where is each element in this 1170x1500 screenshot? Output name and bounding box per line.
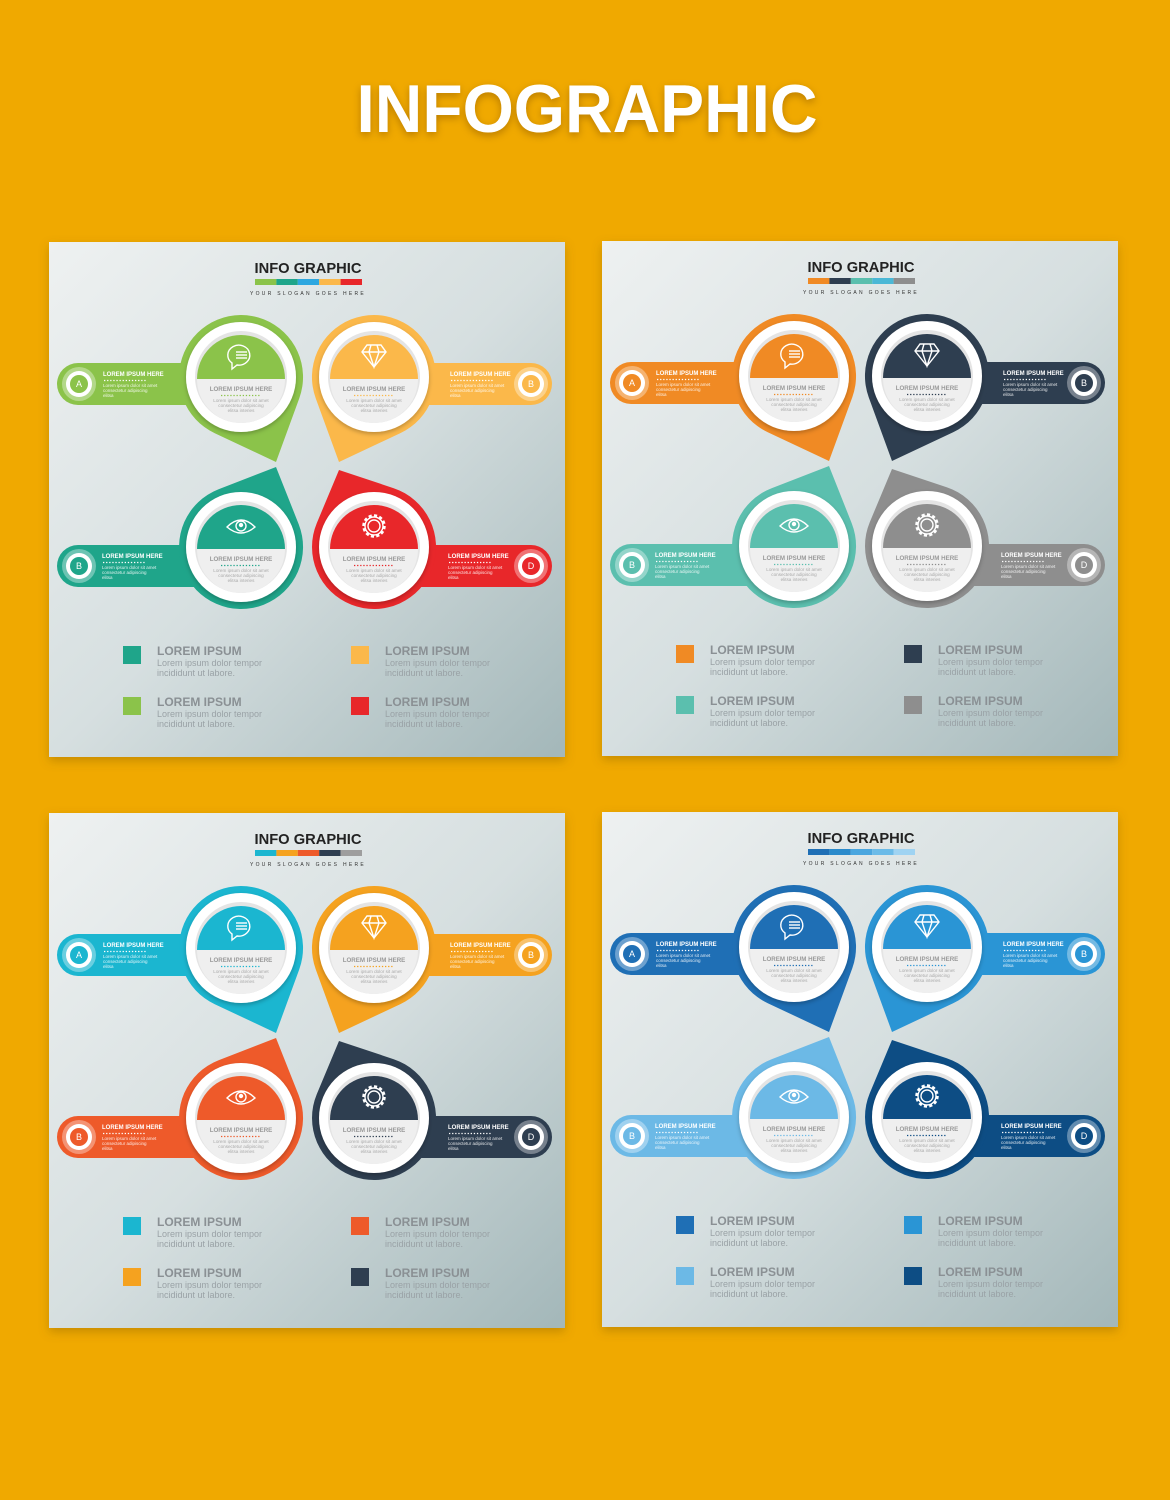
circle: eye: LOREM IPSUM HERE [210, 1127, 272, 1134]
circle: diamond: elitsa interies [914, 407, 941, 412]
legend: Lorem ipsum dolor tempor [157, 658, 262, 668]
panel: orange/dark/teal/gray [602, 241, 1118, 756]
tab D: Lorem ipsum dolor sit amet [1001, 1135, 1056, 1140]
circle: chat: consectetur adipiscing [771, 973, 817, 978]
legend: LOREM IPSUM [938, 1265, 1023, 1279]
circle: diamond: LOREM IPSUM HERE [343, 386, 405, 393]
legend: LOREM IPSUM [385, 1266, 470, 1280]
tab A [57, 363, 241, 405]
tab B: consectetur adipiscing [1003, 958, 1048, 963]
icon: chat bubble [781, 915, 803, 939]
legend: LOREM IPSUM [710, 1214, 795, 1228]
circle: eye: elitsa interies [228, 578, 255, 583]
tab D: Lorem ipsum dolor sit amet [448, 565, 503, 570]
tab C: elitsa [655, 1145, 666, 1150]
tab D: D [528, 561, 535, 571]
legend: incididunt ut labore. [157, 719, 235, 729]
circle: eye: consectetur adipiscing [218, 1144, 264, 1149]
circle: chat: elitsa interies [781, 407, 808, 412]
circle: chat: LOREM IPSUM HERE [210, 957, 272, 964]
legend: Lorem ipsum dolor tempor [710, 708, 815, 718]
circle: eye [732, 1037, 856, 1179]
circle: diamond: consectetur adipiscing [351, 974, 397, 979]
circle: gear: LOREM IPSUM HERE [343, 556, 405, 563]
legend [123, 644, 490, 729]
legend: Lorem ipsum dolor tempor [385, 709, 490, 719]
circle: diamond [865, 314, 989, 461]
circle: eye: consectetur adipiscing [771, 1143, 817, 1148]
panel title: INFO GRAPHIC [254, 831, 362, 848]
circle: chat: Lorem ipsum dolor sit amet [766, 397, 822, 402]
tab A: elitsa [656, 963, 667, 968]
circle: eye: LOREM IPSUM HERE [763, 555, 825, 562]
legend: LOREM IPSUM [157, 644, 242, 658]
legend: Lorem ipsum dolor tempor [710, 1279, 815, 1289]
circle: gear: elitsa interies [361, 1149, 388, 1154]
tab A: Lorem ipsum dolor sit amet [656, 953, 711, 958]
tab C: Lorem ipsum dolor sit amet [102, 1136, 157, 1141]
tab C: elitsa [102, 1146, 113, 1151]
panel title [250, 831, 366, 868]
panel: green/yellow/teal/red [49, 242, 565, 757]
tab A: Lorem ipsum dolor sit amet [103, 954, 158, 959]
tab C: elitsa [655, 574, 666, 579]
legend: incididunt ut labore. [710, 718, 788, 728]
tab B: B [528, 950, 534, 960]
tab D: consectetur adipiscing [1001, 1140, 1046, 1145]
legend: LOREM IPSUM [157, 695, 242, 709]
legend: Lorem ipsum dolor tempor [938, 1279, 1043, 1289]
circle: diamond: LOREM IPSUM HERE [343, 957, 405, 964]
icon: eye [780, 1090, 808, 1103]
circle: gear: elitsa interies [914, 577, 941, 582]
tab A: LOREM IPSUM HERE [103, 943, 164, 949]
tab A: elitsa [103, 393, 114, 398]
circle: diamond: consectetur adipiscing [351, 403, 397, 408]
icon: gear [917, 515, 937, 535]
circle: diamond: elitsa interies [361, 408, 388, 413]
circle: gear [312, 470, 436, 609]
tab C: consectetur adipiscing [655, 1140, 700, 1145]
tab A: LOREM IPSUM HERE [103, 372, 164, 378]
legend: incididunt ut labore. [385, 1290, 463, 1300]
tab B: elitsa [450, 393, 461, 398]
circle: diamond: consectetur adipiscing [904, 973, 950, 978]
tab D [927, 544, 1105, 586]
circle: chat: LOREM IPSUM HERE [210, 386, 272, 393]
tab D: LOREM IPSUM HERE [448, 1125, 509, 1131]
tab A: A [76, 950, 82, 960]
circle: chat [732, 885, 856, 1032]
circle: gear: Lorem ipsum dolor sit amet [899, 567, 955, 572]
legend: LOREM IPSUM [710, 1265, 795, 1279]
tab B: LOREM IPSUM HERE [450, 943, 511, 949]
legend: Lorem ipsum dolor tempor [157, 709, 262, 719]
icon: eye [227, 520, 255, 533]
circle: diamond: LOREM IPSUM HERE [896, 385, 958, 392]
legend: incididunt ut labore. [385, 668, 463, 678]
circle: diamond: elitsa interies [914, 978, 941, 983]
circle: diamond [312, 315, 436, 462]
circle: eye: consectetur adipiscing [771, 572, 817, 577]
panel: cyan/orange/red-orange/dark [49, 813, 565, 1328]
circle: eye [179, 467, 303, 609]
circle: diamond: Lorem ipsum dolor sit amet [899, 397, 955, 402]
tab C: Lorem ipsum dolor sit amet [102, 565, 157, 570]
legend: Lorem ipsum dolor tempor [938, 657, 1043, 667]
circle: gear: Lorem ipsum dolor sit amet [346, 568, 402, 573]
tab D: Lorem ipsum dolor sit amet [1001, 564, 1056, 569]
legend: Lorem ipsum dolor tempor [938, 1228, 1043, 1238]
circle: chat: consectetur adipiscing [771, 402, 817, 407]
circle: chat: Lorem ipsum dolor sit amet [213, 398, 269, 403]
circle: chat [179, 886, 303, 1033]
tab A: consectetur adipiscing [656, 958, 701, 963]
tab B: elitsa [1003, 963, 1014, 968]
legend: LOREM IPSUM [938, 694, 1023, 708]
circle: gear: elitsa interies [914, 1148, 941, 1153]
circle: diamond [312, 886, 436, 1033]
tab B: LOREM IPSUM HERE [1003, 371, 1064, 377]
tab C [610, 1115, 794, 1157]
circle: gear: consectetur adipiscing [351, 1144, 397, 1149]
tab B: Lorem ipsum dolor sit amet [1003, 953, 1058, 958]
tab A: A [76, 379, 82, 389]
circle: diamond: consectetur adipiscing [904, 402, 950, 407]
legend: incididunt ut labore. [157, 668, 235, 678]
circle: eye [179, 1038, 303, 1180]
circle: gear: consectetur adipiscing [904, 1143, 950, 1148]
circle: chat: Lorem ipsum dolor sit amet [213, 969, 269, 974]
circle: gear: LOREM IPSUM HERE [343, 1127, 405, 1134]
tab C: consectetur adipiscing [655, 569, 700, 574]
tab A: consectetur adipiscing [103, 959, 148, 964]
tab D: LOREM IPSUM HERE [1001, 553, 1062, 559]
tab A: elitsa [103, 964, 114, 969]
circle: diamond: Lorem ipsum dolor sit amet [899, 968, 955, 973]
legend: LOREM IPSUM [710, 643, 795, 657]
circle: chat [179, 315, 303, 462]
circle: eye [732, 466, 856, 608]
legend: LOREM IPSUM [157, 1215, 242, 1229]
tab B: consectetur adipiscing [1003, 387, 1048, 392]
tab B: consectetur adipiscing [450, 388, 495, 393]
legend: LOREM IPSUM [385, 695, 470, 709]
tab D: LOREM IPSUM HERE [1001, 1124, 1062, 1130]
tab A: LOREM IPSUM HERE [656, 942, 717, 948]
tab B: consectetur adipiscing [450, 959, 495, 964]
tab C: LOREM IPSUM HERE [102, 554, 163, 560]
circle: chat: consectetur adipiscing [218, 403, 264, 408]
tab A: LOREM IPSUM HERE [656, 371, 717, 377]
circle: chat: Lorem ipsum dolor sit amet [766, 968, 822, 973]
tab B [927, 933, 1105, 975]
tab C [57, 1116, 241, 1158]
circle: diamond: Lorem ipsum dolor sit amet [346, 398, 402, 403]
main title: INFOGRAPHIC [356, 71, 818, 147]
tab C: B [629, 1131, 635, 1141]
circle: gear: consectetur adipiscing [351, 573, 397, 578]
tab D: elitsa [1001, 1145, 1012, 1150]
tab B [374, 934, 552, 976]
circle: gear: LOREM IPSUM HERE [896, 555, 958, 562]
tab A: Lorem ipsum dolor sit amet [103, 383, 158, 388]
tab D: consectetur adipiscing [448, 1141, 493, 1146]
legend: Lorem ipsum dolor tempor [385, 1229, 490, 1239]
tab B: Lorem ipsum dolor sit amet [1003, 382, 1058, 387]
icon: gear [917, 1086, 937, 1106]
tab C: B [76, 561, 82, 571]
circle: eye: Lorem ipsum dolor sit amet [766, 567, 822, 572]
tab C: elitsa [102, 575, 113, 580]
legend: incididunt ut labore. [157, 1239, 235, 1249]
legend: Lorem ipsum dolor tempor [385, 1280, 490, 1290]
tab C: Lorem ipsum dolor sit amet [655, 564, 710, 569]
legend: Lorem ipsum dolor tempor [157, 1229, 262, 1239]
circle: gear [865, 469, 989, 608]
circle: gear [865, 1040, 989, 1179]
tab C: LOREM IPSUM HERE [655, 553, 716, 559]
tab A [610, 362, 794, 404]
tab D: consectetur adipiscing [448, 570, 493, 575]
tab B: elitsa [450, 964, 461, 969]
tab A: consectetur adipiscing [656, 387, 701, 392]
circle: chat: LOREM IPSUM HERE [763, 956, 825, 963]
tab D: D [528, 1132, 535, 1142]
circle: gear: Lorem ipsum dolor sit amet [346, 1139, 402, 1144]
tab C [610, 544, 794, 586]
circle: eye: Lorem ipsum dolor sit amet [213, 1139, 269, 1144]
legend: incididunt ut labore. [938, 1238, 1016, 1248]
tab A: A [629, 378, 635, 388]
icon: eye [780, 519, 808, 532]
circle: gear: elitsa interies [361, 578, 388, 583]
tab B [927, 362, 1105, 404]
legend: incididunt ut labore. [938, 667, 1016, 677]
legend: LOREM IPSUM [385, 644, 470, 658]
icon: diamond [915, 344, 939, 366]
legend: incididunt ut labore. [710, 1238, 788, 1248]
legend: incididunt ut labore. [710, 667, 788, 677]
tab B: LOREM IPSUM HERE [450, 372, 511, 378]
tab B: B [528, 379, 534, 389]
tab C: consectetur adipiscing [102, 1141, 147, 1146]
legend: LOREM IPSUM [157, 1266, 242, 1280]
panel title [803, 830, 919, 867]
tab D: Lorem ipsum dolor sit amet [448, 1136, 503, 1141]
icon: diamond [362, 345, 386, 367]
tab B: B [1081, 949, 1087, 959]
legend: Lorem ipsum dolor tempor [385, 658, 490, 668]
panel title: YOUR SLOGAN GOES HERE [250, 291, 366, 297]
legend: Lorem ipsum dolor tempor [938, 708, 1043, 718]
tab B: B [1081, 378, 1087, 388]
legend: Lorem ipsum dolor tempor [710, 657, 815, 667]
tab C: B [76, 1132, 82, 1142]
circle: diamond [865, 885, 989, 1032]
tab C: B [629, 560, 635, 570]
legend: incididunt ut labore. [385, 719, 463, 729]
circle: gear: Lorem ipsum dolor sit amet [899, 1138, 955, 1143]
icon: chat bubble [781, 344, 803, 368]
tab D: consectetur adipiscing [1001, 569, 1046, 574]
tab D: elitsa [448, 1146, 459, 1151]
tab A [57, 934, 241, 976]
circle: eye: Lorem ipsum dolor sit amet [213, 568, 269, 573]
panel title: YOUR SLOGAN GOES HERE [803, 290, 919, 296]
circle: eye: elitsa interies [781, 577, 808, 582]
icon: diamond [915, 915, 939, 937]
legend: Lorem ipsum dolor tempor [710, 1228, 815, 1238]
circle: eye: consectetur adipiscing [218, 573, 264, 578]
tab D: elitsa [448, 575, 459, 580]
tab D [374, 1116, 552, 1158]
tab A: elitsa [656, 392, 667, 397]
circle: chat: consectetur adipiscing [218, 974, 264, 979]
circle: chat: LOREM IPSUM HERE [763, 385, 825, 392]
panel title: INFO GRAPHIC [254, 260, 362, 277]
legend: LOREM IPSUM [938, 643, 1023, 657]
circle: eye: Lorem ipsum dolor sit amet [766, 1138, 822, 1143]
tab D: D [1081, 1131, 1088, 1141]
legend: incididunt ut labore. [938, 1289, 1016, 1299]
circle: chat: elitsa interies [228, 979, 255, 984]
circle: diamond: Lorem ipsum dolor sit amet [346, 969, 402, 974]
panel title: YOUR SLOGAN GOES HERE [803, 861, 919, 867]
circle: diamond: elitsa interies [361, 979, 388, 984]
circle: eye: elitsa interies [781, 1148, 808, 1153]
circle: eye: elitsa interies [228, 1149, 255, 1154]
tab D: D [1081, 560, 1088, 570]
tab B: elitsa [1003, 392, 1014, 397]
icon: chat bubble [228, 345, 250, 369]
legend: incididunt ut labore. [710, 1289, 788, 1299]
panel: blues [602, 812, 1118, 1327]
legend: incididunt ut labore. [938, 718, 1016, 728]
legend: LOREM IPSUM [938, 1214, 1023, 1228]
circle: eye: LOREM IPSUM HERE [210, 556, 272, 563]
tab B [374, 363, 552, 405]
circle: diamond: LOREM IPSUM HERE [896, 956, 958, 963]
circle: gear: LOREM IPSUM HERE [896, 1126, 958, 1133]
legend: incididunt ut labore. [385, 1239, 463, 1249]
legend: LOREM IPSUM [385, 1215, 470, 1229]
circle: chat: elitsa interies [228, 408, 255, 413]
legend: incididunt ut labore. [157, 1290, 235, 1300]
tab A: Lorem ipsum dolor sit amet [656, 382, 711, 387]
panel title [250, 260, 366, 297]
tab B: Lorem ipsum dolor sit amet [450, 954, 505, 959]
panel title: INFO GRAPHIC [808, 259, 915, 276]
circle: chat [732, 314, 856, 461]
panel title [803, 259, 919, 296]
legend [676, 643, 1043, 728]
tab C: Lorem ipsum dolor sit amet [655, 1135, 710, 1140]
tab C: LOREM IPSUM HERE [102, 1125, 163, 1131]
tab A: consectetur adipiscing [103, 388, 148, 393]
tab A [610, 933, 794, 975]
icon: gear [364, 1087, 384, 1107]
panel title: YOUR SLOGAN GOES HERE [250, 862, 366, 868]
tab D: elitsa [1001, 574, 1012, 579]
icon: gear [364, 516, 384, 536]
circle: gear [312, 1041, 436, 1180]
tab B: LOREM IPSUM HERE [1003, 942, 1064, 948]
legend [676, 1214, 1043, 1299]
tab D: LOREM IPSUM HERE [448, 554, 509, 560]
icon: chat bubble [228, 916, 250, 940]
icon: diamond [362, 916, 386, 938]
tab A: A [629, 949, 635, 959]
legend: LOREM IPSUM [710, 694, 795, 708]
tab C [57, 545, 241, 587]
circle: gear: consectetur adipiscing [904, 572, 950, 577]
legend: Lorem ipsum dolor tempor [157, 1280, 262, 1290]
tab B: Lorem ipsum dolor sit amet [450, 383, 505, 388]
tab C: consectetur adipiscing [102, 570, 147, 575]
legend [123, 1215, 490, 1300]
tab D [927, 1115, 1105, 1157]
circle: chat: elitsa interies [781, 978, 808, 983]
tab C: LOREM IPSUM HERE [655, 1124, 716, 1130]
circle: eye: LOREM IPSUM HERE [763, 1126, 825, 1133]
tab D [374, 545, 552, 587]
panel title: INFO GRAPHIC [808, 830, 915, 847]
icon: eye [227, 1091, 255, 1104]
